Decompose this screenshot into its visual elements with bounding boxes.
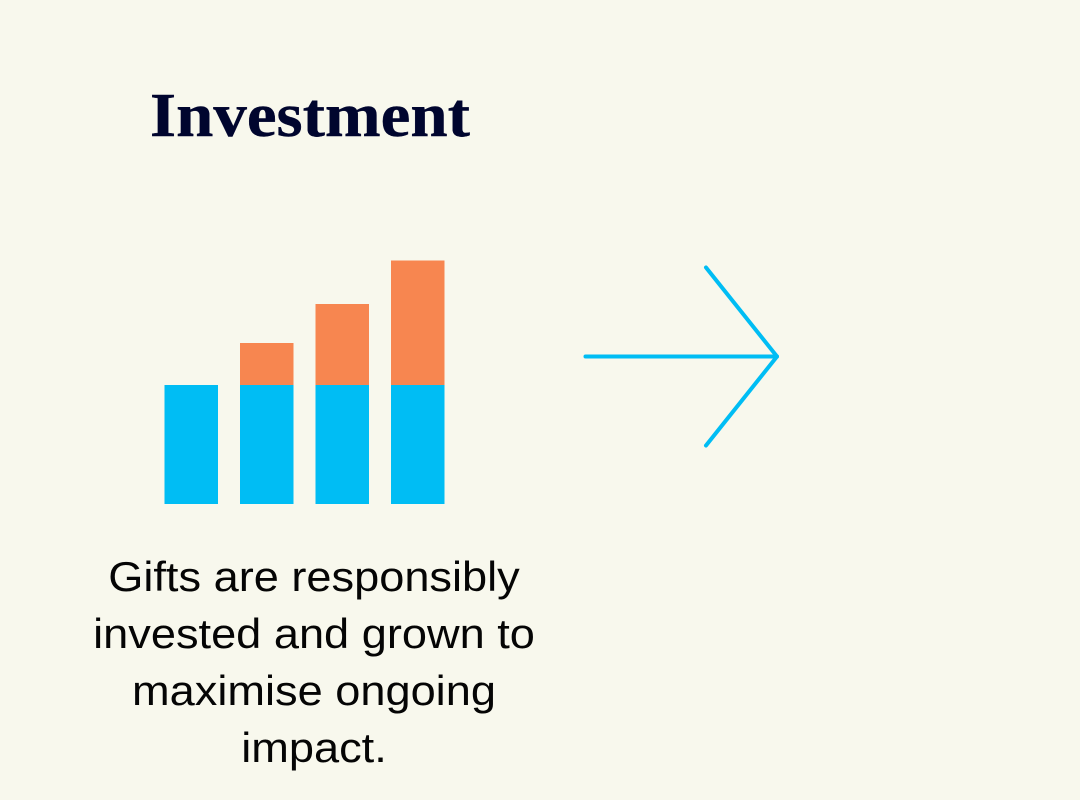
description text: Gifts are responsibly (108, 553, 520, 600)
title: Investment (150, 82, 470, 150)
bar 4 (391, 260, 444, 504)
description text (93, 553, 535, 771)
description text: invested and grown to (93, 610, 535, 657)
bar 1 (164, 385, 218, 504)
description text: impact. (241, 724, 387, 771)
bar 2 (240, 343, 294, 504)
arrow (584, 265, 779, 448)
description text: maximise ongoing (132, 667, 496, 714)
bar 3 (316, 304, 369, 504)
